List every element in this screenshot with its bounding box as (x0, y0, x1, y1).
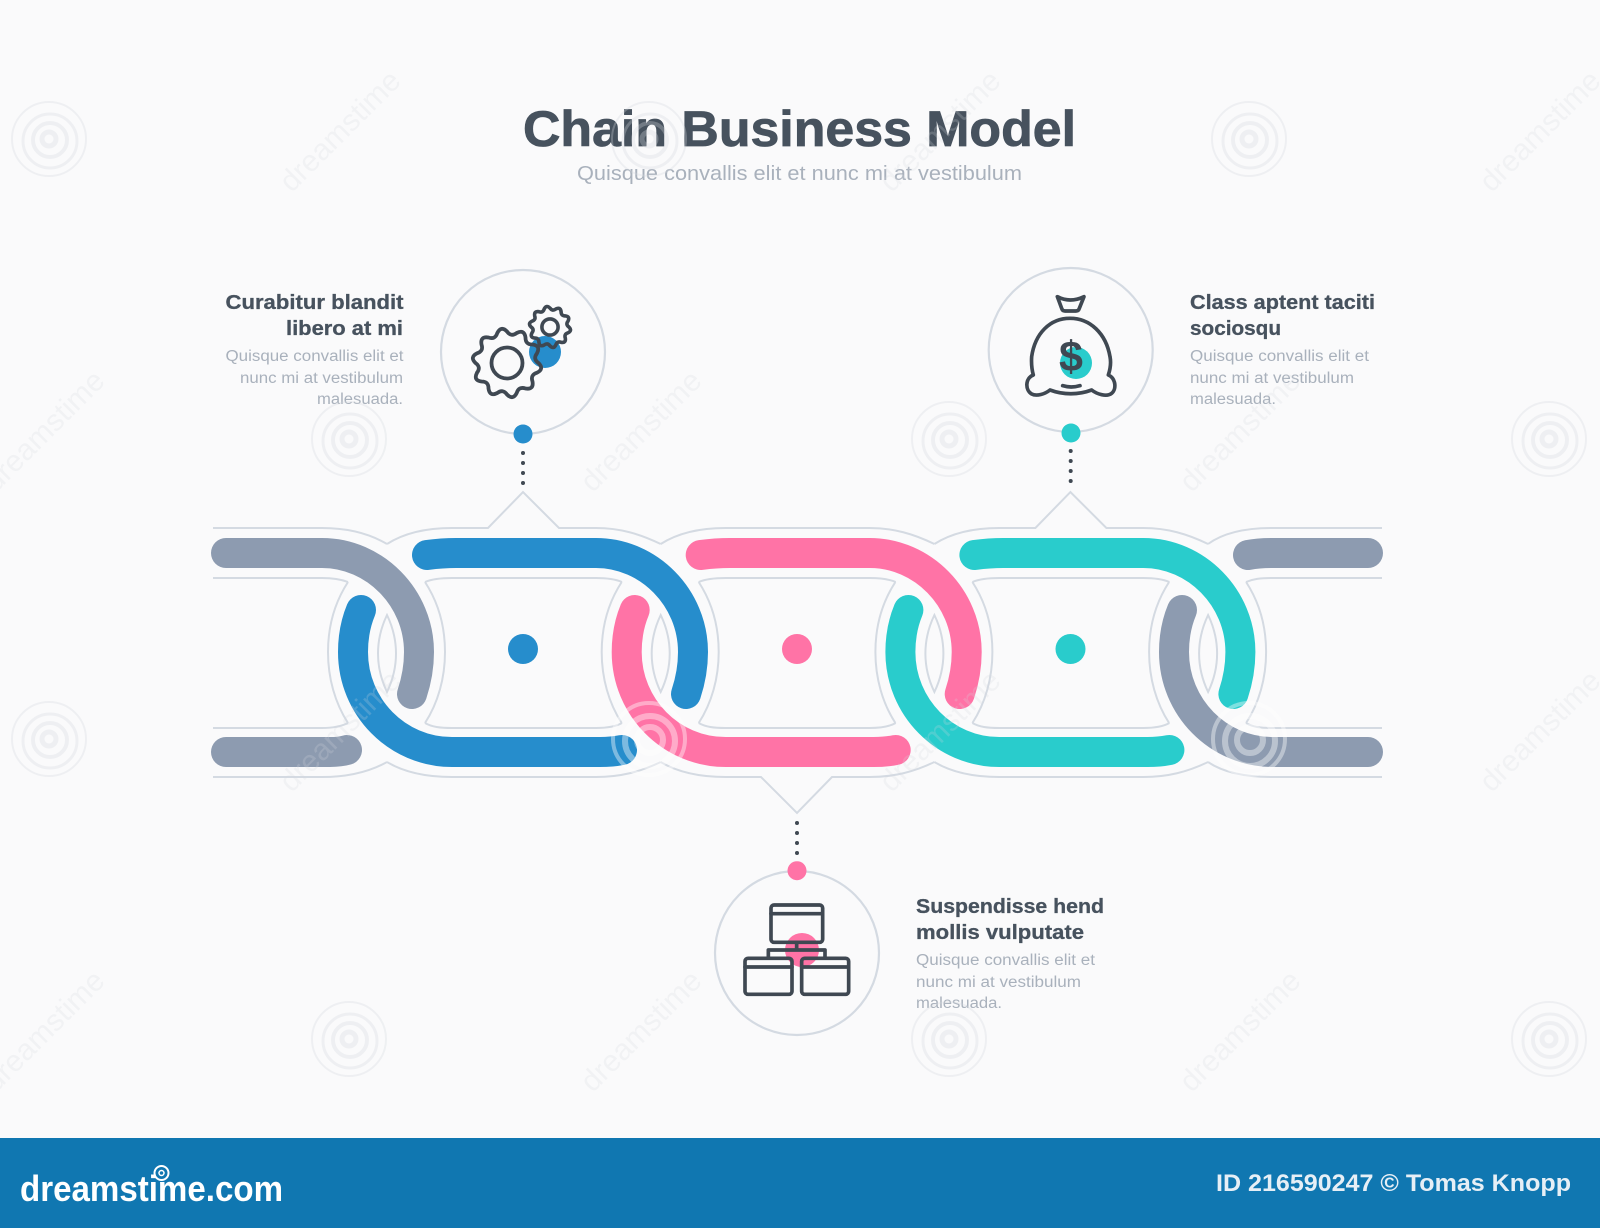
callout: gears (441, 270, 605, 485)
link centre dot: pink (782, 634, 812, 664)
chain link: left grey end (226, 553, 419, 752)
icon: gears (473, 306, 570, 397)
watermark pattern: dreamstime (273, 64, 407, 198)
watermark pattern: dreamstime (1173, 964, 1307, 1098)
text block: gears: libero at mi (286, 318, 403, 340)
watermark pattern: dreamstime (574, 364, 708, 498)
text block: money bag: Quisque convallis elit et (1190, 348, 1370, 365)
icon: dollar sign: $ (1059, 333, 1083, 381)
text block: gears (226, 292, 404, 408)
text block: network windows: Suspendisse hend (916, 896, 1104, 918)
watermark pattern: dreamstime (1173, 364, 1307, 498)
watermark pattern: dreamstime (873, 64, 1007, 198)
link centre dot: blue (508, 634, 538, 664)
callout: network windows (715, 821, 879, 1035)
chain link: teal (900, 553, 1240, 752)
footer credit: ID 216590247 © Tomas Knopp (1216, 1170, 1571, 1197)
footer bar (0, 1138, 1600, 1228)
text block: money bag: nunc mi at vestibulum (1190, 370, 1354, 387)
footer logo: dreamstime.com (20, 1168, 283, 1209)
chain link: right grey end (1174, 553, 1368, 752)
callout: money bag (989, 268, 1153, 483)
text block: network windows: mollis vulputate (916, 922, 1084, 944)
subtitle: Quisque convallis elit et nunc mi at vestibulum (577, 163, 1022, 185)
chain link: pink (627, 553, 967, 752)
link centre dot: teal (1056, 634, 1086, 664)
text block: gears: malesuada. (317, 391, 403, 408)
text block: network windows (916, 896, 1104, 1012)
title: Chain Business Model (523, 101, 1076, 157)
text block: gears: Curabitur blandit (226, 292, 404, 314)
text block: money bag (1190, 292, 1375, 408)
text block: network windows: malesuada. (916, 995, 1002, 1012)
text block: money bag: Class aptent taciti (1190, 292, 1375, 314)
text block: gears: Quisque convallis elit et (226, 348, 404, 365)
text block: network windows: nunc mi at vestibulum (916, 974, 1081, 991)
icon: network windows (745, 905, 849, 994)
icon: money bag (1027, 297, 1115, 395)
chain link: blue (353, 553, 693, 752)
text block: money bag: sociosqu (1190, 318, 1281, 340)
text block: gears: nunc mi at vestibulum (240, 370, 403, 387)
chain outline (213, 492, 1382, 813)
text block: money bag: malesuada. (1190, 391, 1276, 408)
watermark pattern: dreamstime (873, 664, 1007, 798)
watermark pattern: dreamstime (574, 964, 708, 1098)
watermark pattern: dreamstime (273, 664, 407, 798)
text block: network windows: Quisque convallis elit et (916, 952, 1096, 969)
